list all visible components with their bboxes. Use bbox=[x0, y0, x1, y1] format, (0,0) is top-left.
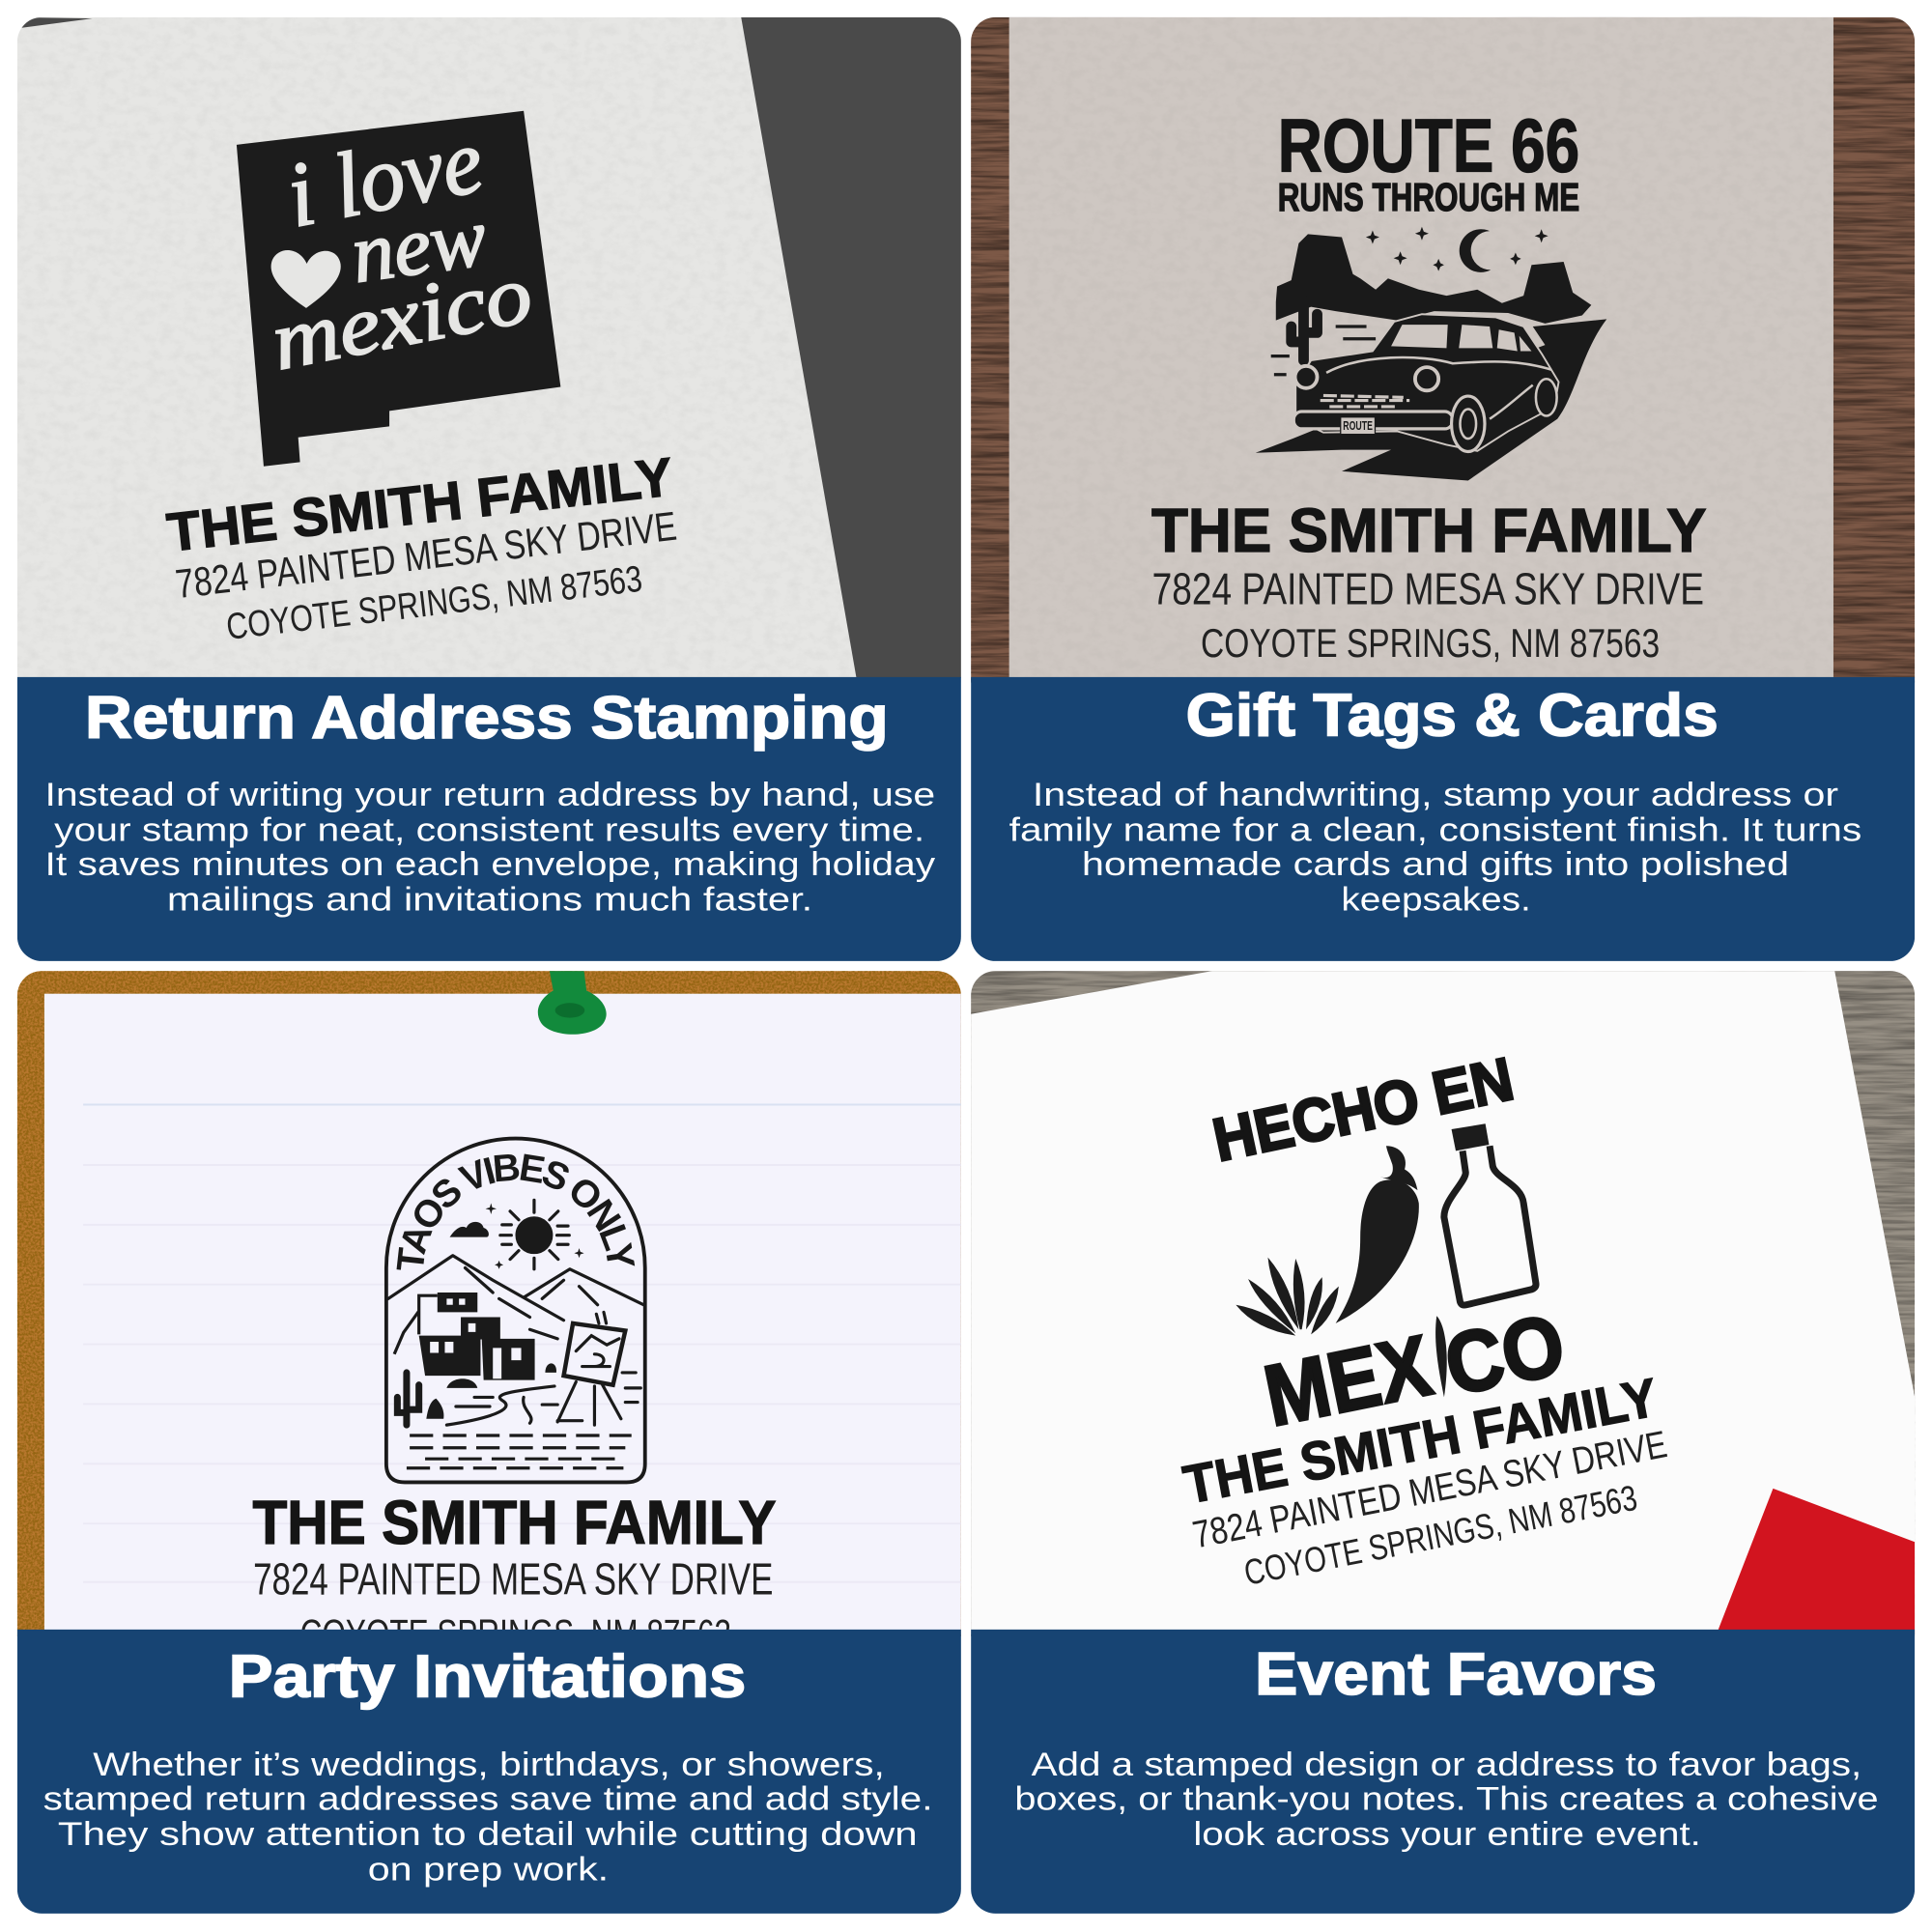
stamp: New Mexico state shape bbox=[237, 109, 560, 467]
illustration: vintage car in desert bbox=[1256, 227, 1606, 480]
description: keepsakes. bbox=[1341, 882, 1531, 919]
adobe buildings bbox=[419, 1293, 535, 1380]
heading: Event Favors bbox=[1255, 1641, 1657, 1708]
stamp address text: THE SMITH FAMILY bbox=[164, 445, 676, 563]
panel: event favors bbox=[971, 971, 1915, 1919]
photo: white paper on dark card bbox=[17, 17, 961, 683]
stamp heading: route 66 bbox=[1278, 104, 1579, 219]
stamp text: mexico with chili: MEX bbox=[1257, 1317, 1438, 1444]
stamp text: mexico with chili bbox=[1257, 1295, 1573, 1444]
icon: chili pepper bbox=[1336, 1146, 1419, 1323]
description: boxes, or thank-you notes. This creates a cohesive bbox=[1014, 1781, 1879, 1818]
stamp address text: 7824 PAINTED MESA SKY DRIVE bbox=[253, 1554, 773, 1605]
description: look across your entire event. bbox=[1193, 1816, 1701, 1853]
mountains bbox=[388, 1256, 643, 1339]
script: i love new mexico bbox=[275, 148, 529, 371]
license plate: ROUTE bbox=[1343, 418, 1373, 433]
stamp address text: 7824 PAINTED MESA SKY DRIVE bbox=[1152, 564, 1704, 614]
heading: Return Address Stamping bbox=[85, 685, 889, 752]
description: stamped return addresses save time and add style. bbox=[43, 1781, 933, 1818]
script: i love new mexico: mexico bbox=[265, 246, 539, 387]
description bbox=[45, 777, 936, 919]
stamp address text: COYOTE SPRINGS, NM 87563 bbox=[224, 558, 644, 648]
stamp address text bbox=[1151, 496, 1707, 666]
description: Add a stamped design or address to favor bags, bbox=[1032, 1747, 1861, 1783]
description: homemade cards and gifts into polished bbox=[1082, 846, 1789, 883]
icon: tequila bottle bbox=[1444, 1123, 1536, 1305]
stamp address text bbox=[165, 457, 676, 639]
caption band bbox=[17, 1630, 961, 1919]
stamp address text: THE SMITH FAMILY bbox=[1179, 1366, 1662, 1516]
description bbox=[1014, 1747, 1879, 1853]
panel: gift tags and cards bbox=[971, 17, 1915, 967]
heading: Party Invitations bbox=[229, 1643, 746, 1710]
stamp address text: COYOTE SPRINGS, NM 87563 bbox=[300, 1610, 731, 1656]
stamp address text bbox=[252, 1488, 777, 1656]
icon: heart bbox=[271, 250, 341, 308]
stamp address text: COYOTE SPRINGS, NM 87563 bbox=[1201, 620, 1660, 666]
stamp address text: COYOTE SPRINGS, NM 87563 bbox=[1241, 1478, 1640, 1593]
badge text: TAOS VIBES ONLY bbox=[396, 1153, 636, 1270]
easel and canvas bbox=[557, 1312, 640, 1425]
description: your stamp for neat, consistent results every time. bbox=[54, 812, 924, 849]
panel: party invitations bbox=[17, 971, 961, 1914]
description bbox=[1009, 777, 1861, 919]
stamp address text: 7824 PAINTED MESA SKY DRIVE bbox=[1189, 1423, 1670, 1557]
icon: green push pin bbox=[538, 971, 607, 1035]
description: Instead of handwriting, stamp your address or bbox=[1033, 777, 1838, 813]
photo: white card on wood with red box bbox=[971, 971, 1915, 1636]
stamp address text: 7824 PAINTED MESA SKY DRIVE bbox=[173, 503, 679, 607]
description: Whether it’s weddings, birthdays, or showers, bbox=[93, 1747, 885, 1783]
stamp address text: THE SMITH FAMILY bbox=[252, 1488, 777, 1557]
icon: moon bbox=[1460, 229, 1491, 272]
cactus bbox=[397, 1373, 419, 1425]
description: on prep work. bbox=[368, 1851, 609, 1888]
caption band bbox=[971, 1630, 1915, 1919]
stamp address text: THE SMITH FAMILY bbox=[1151, 496, 1707, 565]
license plate bbox=[1341, 417, 1375, 435]
description: family name for a clean, consistent finish. It turns bbox=[1009, 812, 1861, 849]
icon: cloud bbox=[450, 1222, 489, 1237]
description: mailings and invitations much faster. bbox=[167, 882, 812, 919]
stamp: Taos arch badge bbox=[384, 1136, 647, 1484]
river and lines bbox=[446, 1386, 582, 1425]
stamp heading: route 66: RUNS THROUGH ME bbox=[1278, 175, 1579, 219]
description: It saves minutes on each envelope, making holiday bbox=[45, 846, 936, 883]
stars bbox=[1366, 227, 1548, 271]
description: They show attention to detail while cutting down bbox=[58, 1816, 918, 1853]
photo: kraft paper on wood bbox=[971, 17, 1915, 683]
caption band bbox=[17, 677, 961, 967]
script: i love new mexico: i love bbox=[279, 109, 491, 246]
photo: ruled note on cork board bbox=[17, 971, 961, 1636]
stamp address text bbox=[1179, 1366, 1670, 1593]
heading: Gift Tags & Cards bbox=[1186, 682, 1719, 749]
icon: agave bbox=[1236, 1258, 1339, 1336]
stamp heading: hecho en: HECHO EN bbox=[1208, 1045, 1520, 1175]
description: Instead of writing your return address by hand, use bbox=[45, 777, 935, 813]
caption band bbox=[971, 677, 1915, 967]
script: i love new mexico: new bbox=[346, 189, 492, 300]
stamp text: mexico with chili: CO bbox=[1437, 1295, 1573, 1413]
panel: return address stamping bbox=[17, 17, 961, 967]
stamp heading: route 66: ROUTE 66 bbox=[1278, 104, 1579, 187]
icon: sun bbox=[500, 1200, 569, 1269]
description bbox=[43, 1747, 933, 1888]
